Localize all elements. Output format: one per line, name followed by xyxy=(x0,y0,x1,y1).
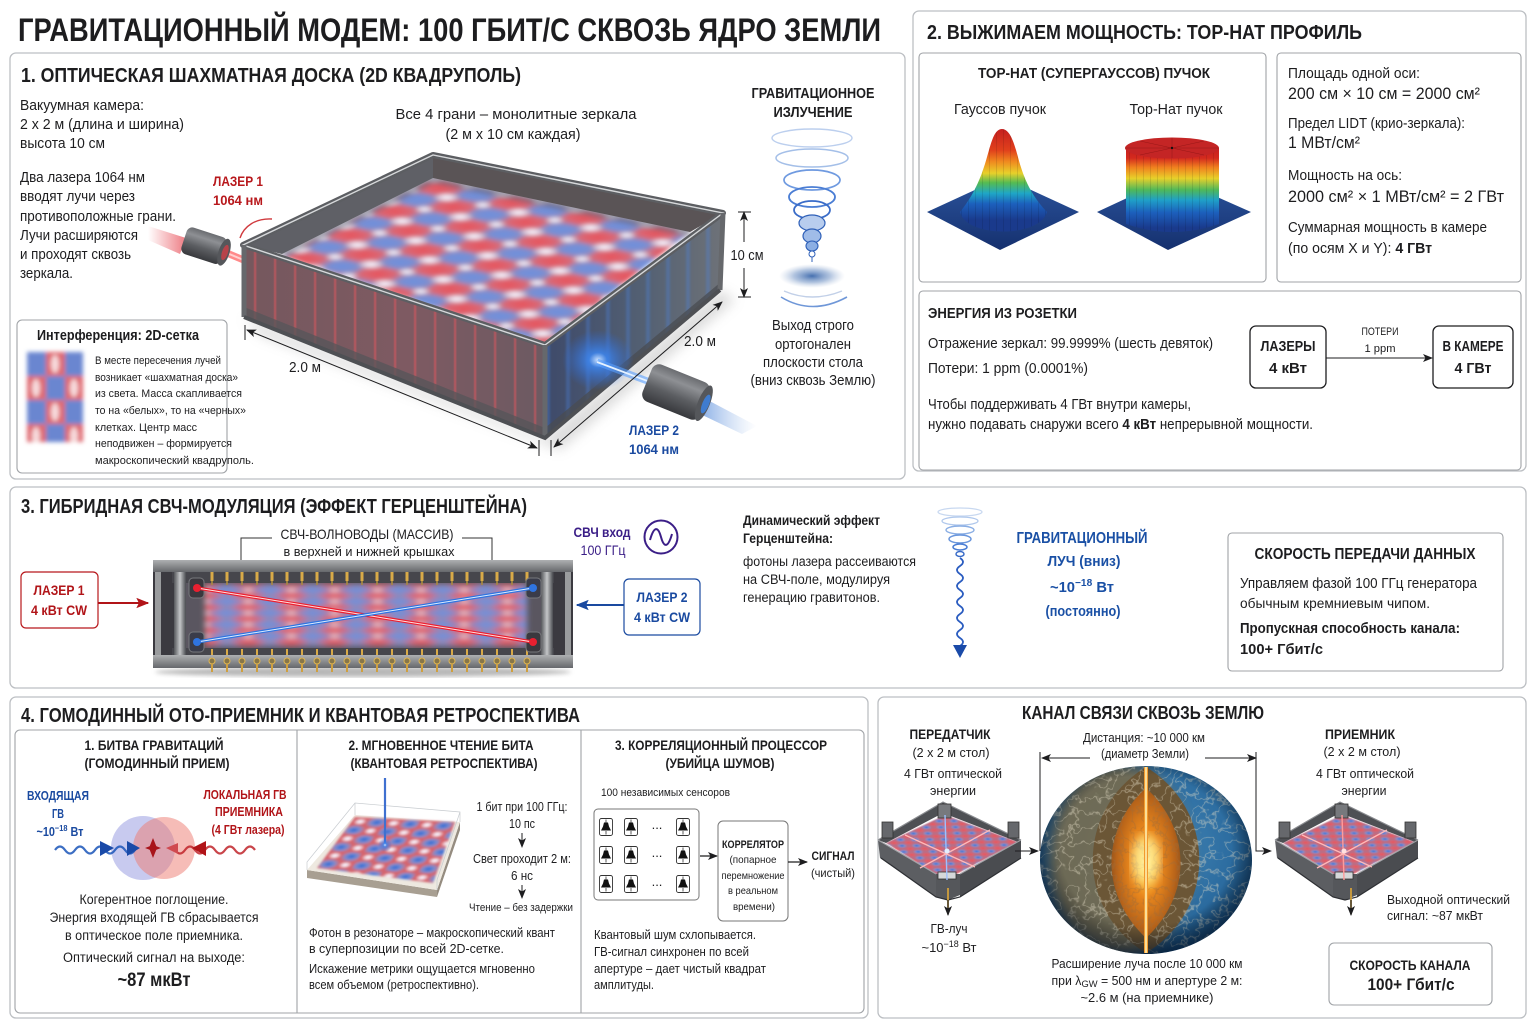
text block: interference description: из света. Масса скапливается xyxy=(95,388,242,400)
text block: dynamic Gertsenshtein effect: Динамический эффект xyxy=(743,513,880,528)
label: gravity beam: ~10 xyxy=(1050,580,1075,596)
arrow: losses: 1 ppm xyxy=(1364,343,1396,355)
text block: lasers: вводят лучи через xyxy=(20,189,135,205)
icon: microwave generator xyxy=(644,520,678,554)
panel 5: channel through the Earth xyxy=(878,697,1526,1018)
label: gravity beam: Вт xyxy=(1092,580,1114,596)
text block: coherent absorption: ~87 мкВт xyxy=(118,970,190,991)
sub-panel 3: correlation processor xyxy=(594,736,855,992)
text block: lasers: противоположные грани. xyxy=(20,209,176,225)
diagram: sensor array: ... xyxy=(652,817,662,832)
text block: interference description xyxy=(95,355,254,467)
label: optical output xyxy=(1387,893,1510,923)
panel: power calculation: 2000 см² × 1 МВт/см² = 2 ГВт xyxy=(1288,188,1504,206)
heading 3: 3. ГИБРИДНАЯ СВЧ-МОДУЛЯЦИЯ (ЭФФЕКТ ГЕРЦЕНШТЕЙНА) xyxy=(21,494,527,518)
label: gravity beam xyxy=(1016,528,1148,620)
label: GW beam: Вт xyxy=(959,940,977,955)
panel: power calculation: 1 МВт/см² xyxy=(1288,134,1360,152)
label: incoming GW: −18 xyxy=(55,823,68,833)
text block: lasers: зеркала. xyxy=(20,266,73,282)
panel: energy from the socket: ЭНЕРГИЯ ИЗ РОЗЕТКИ xyxy=(928,306,1077,322)
sub-panel 3: correlation processor: 3. КОРРЕЛЯЦИОННЫЙ ПРОЦЕССОР xyxy=(615,736,827,753)
arrow: losses: ПОТЕРИ xyxy=(1362,326,1398,338)
label: gravity beam: (постоянно) xyxy=(1046,604,1121,620)
box: correlator xyxy=(718,821,788,921)
text block: coherent absorption: в оптическое поле приемника. xyxy=(65,928,243,943)
box: in chamber 4 GW: В КАМЕРЕ xyxy=(1442,339,1504,355)
panel: energy from the socket xyxy=(919,291,1521,470)
dividers xyxy=(297,730,581,1013)
label: receiver: (2 x 2 м стол) xyxy=(1324,744,1400,759)
arrow: laser 2 in xyxy=(577,604,624,606)
label: receiver xyxy=(1316,726,1414,798)
label: gravity beam: ЛУЧ (вниз) xyxy=(1048,554,1121,570)
label: microwave input 100 GHz: 100 ГГц xyxy=(580,542,626,558)
text block: beam spread: при λ xyxy=(1052,974,1082,988)
box: data rate: СКОРОСТЬ ПЕРЕДАЧИ ДАННЫХ xyxy=(1254,546,1476,563)
chart: gaussian beam xyxy=(927,102,1079,250)
label: optical output: сигнал: ~87 мкВт xyxy=(1387,909,1483,923)
label: microwave input 100 GHz: СВЧ вход xyxy=(574,524,631,540)
box: data rate: Управляем фазой 100 ГГц генератора xyxy=(1240,576,1478,592)
label: distance xyxy=(1040,731,1271,851)
heading 4: 4. ГОМОДИННЫЙ ОТО-ПРИЕМНИК И КВАНТОВАЯ РЕТРОСПЕКТИВА xyxy=(21,703,580,727)
label: optical output: Выходной оптический xyxy=(1387,893,1510,907)
label: clean signal: (чистый) xyxy=(811,866,855,880)
label: receiver: ПРИЕМНИК xyxy=(1325,726,1395,742)
box: channel speed: СКОРОСТЬ КАНАЛА xyxy=(1350,957,1470,973)
text block: beam spread: GW xyxy=(1081,979,1098,990)
text block: lasers: Два лазера 1064 нм xyxy=(20,170,145,186)
box: lasers 4 kW: ЛАЗЕРЫ xyxy=(1260,339,1316,355)
label: microwave waveguides xyxy=(241,526,492,560)
sub-panel 1: battle of gravities: 1. БИТВА ГРАВИТАЦИЙ xyxy=(84,736,224,753)
label: local GW: ЛОКАЛЬНАЯ ГВ xyxy=(204,788,286,802)
text block: interference description: макроскопический квадруполь. xyxy=(95,455,254,467)
label: microwave waveguides: СВЧ-ВОЛНОВОДЫ (МАССИВ) xyxy=(280,526,454,542)
label: distance: Дистанция: ~10 000 км xyxy=(1083,731,1205,745)
dimension: front left 2.0 m: 2.0 м xyxy=(289,360,321,376)
label: incoming GW xyxy=(27,789,89,839)
panel: energy from the socket: Потери: 1 ppm (0.0001%) xyxy=(928,361,1088,377)
label: sensors: 100 независимых сенсоров xyxy=(601,787,730,799)
dimension: height 10 cm xyxy=(730,212,764,297)
box: laser 2 4 kW CW: 4 кВт CW xyxy=(634,609,691,625)
text block: interference description: неподвижен – формируется xyxy=(95,438,232,450)
inner frame xyxy=(15,730,864,1013)
text block: photon in resonator: Фотон в резонаторе – макроскопический квант xyxy=(309,926,555,940)
text block: lasers: и проходят сквозь xyxy=(20,247,131,263)
box: laser 1 4 kW CW: ЛАЗЕР 1 xyxy=(34,582,85,598)
text block: dynamic Gertsenshtein effect: на СВЧ-поле, модулируя xyxy=(743,572,890,587)
label: transmitter: ПЕРЕДАТЧИК xyxy=(910,726,991,742)
sub-panel 2: instant bit reading xyxy=(307,737,573,992)
box: in chamber 4 GW xyxy=(1433,326,1513,388)
label: incoming GW: Вт xyxy=(67,825,84,839)
panel 4: homodyne receiver xyxy=(10,697,868,1018)
text block: coherent absorption: Энергия входящей ГВ сбрасывается xyxy=(50,910,258,925)
sub-panel 2: instant bit reading: (КВАНТОВАЯ РЕТРОСПЕКТИВА) xyxy=(350,755,538,771)
icon: gravity wave cone xyxy=(772,129,852,306)
box: data rate: обычным кремниевым чипом. xyxy=(1240,595,1430,611)
dimension: front right 2.0 m: 2.0 м xyxy=(684,334,716,350)
label: GW beam: −18 xyxy=(944,939,959,949)
label: laser 1 xyxy=(213,173,263,208)
text block: orthogonal output: (вниз сквозь Землю) xyxy=(750,373,876,389)
text block: quantum noise: ГВ-сигнал синхронен по всей xyxy=(594,945,749,959)
label: transmitter: (2 x 2 м стол) xyxy=(912,745,990,760)
panel: power calculation: Мощность на ось: xyxy=(1288,168,1402,184)
text block: dynamic Gertsenshtein effect: фотоны лазера рассеиваются xyxy=(743,554,916,569)
text block: orthogonal output: ортогонален xyxy=(775,337,851,353)
heading 5: КАНАЛ СВЯЗИ СКВОЗЬ ЗЕМЛЮ xyxy=(1022,703,1264,723)
label: distance: (диаметр Земли) xyxy=(1101,747,1189,761)
text block: timing ladder xyxy=(469,800,573,914)
label: incoming GW: ~10 xyxy=(36,825,58,839)
label: transmitter: 4 ГВт оптической xyxy=(904,766,1002,781)
dimension: front right 2.0 m xyxy=(551,302,722,456)
icon: gravity beam down xyxy=(938,508,982,658)
box: laser 2 4 kW CW: ЛАЗЕР 2 xyxy=(636,589,688,605)
panel: power calculation: 200 см × 10 см = 2000 см² xyxy=(1288,85,1480,103)
text block: vacuum chamber xyxy=(20,98,184,152)
heading: gravity radiation: ГРАВИТАЦИОННОЕ xyxy=(752,86,875,102)
arrow: laser 1 in xyxy=(98,602,148,604)
label: gravity beam: −18 xyxy=(1075,578,1093,589)
arrow: correlator to signal xyxy=(788,861,807,863)
box: laser 1 4 kW CW: 4 кВт CW xyxy=(31,602,88,618)
arrow: array to correlator xyxy=(700,855,717,857)
box: correlator: в реальном xyxy=(728,885,778,897)
sub-panel 1: battle of gravities: (ГОМОДИННЫЙ ПРИЕМ) xyxy=(84,754,230,771)
illustration: transmitter table xyxy=(878,802,1038,915)
box: channel speed: 100+ Гбит/с xyxy=(1368,976,1454,994)
icon: laser 1 emitter xyxy=(148,219,272,267)
label: local GW: ПРИЕМНИКА xyxy=(215,805,283,819)
label: local GW: (4 ГВт лазера) xyxy=(212,823,284,837)
heading: gravity radiation xyxy=(752,86,875,121)
illustration: Earth cross-section xyxy=(1040,764,1252,956)
panel: top-hat beam: ТОР-НАТ (СУПЕРГАУССОВ) ПУЧОК xyxy=(978,66,1210,82)
text block: vacuum chamber: 2 x 2 м (длина и ширина) xyxy=(20,117,184,133)
text block: orthogonal output: плоскости стола xyxy=(763,355,864,371)
heading 1: 1. ОПТИЧЕСКАЯ ШАХМАТНАЯ ДОСКА (2D КВАДРУПОЛЬ) xyxy=(21,65,521,87)
chart: top-hat beam: Тор-Нат пучок xyxy=(1130,102,1223,118)
label: GW beam: ~10 xyxy=(922,940,944,955)
label: incoming GW: ГВ xyxy=(52,807,64,821)
text block: vacuum chamber: высота 10 см xyxy=(20,136,105,152)
text block: quantum noise: Квантовый шум схлопывается. xyxy=(594,928,756,942)
text block: interference description: В месте пересечения лучей xyxy=(95,355,221,367)
swatch: interference pattern xyxy=(27,352,83,442)
text block: quantum noise: амплитуды. xyxy=(594,978,654,992)
text block: beam spread: Расширение луча после 10 000 км xyxy=(1052,957,1242,971)
box: channel speed xyxy=(1329,943,1492,1005)
label: mirrors xyxy=(396,107,637,143)
panel 3: hybrid microwave modulation xyxy=(10,487,1526,688)
illustration: chamber box xyxy=(243,155,735,450)
label: gravity beam: ГРАВИТАЦИОННЫЙ xyxy=(1016,528,1148,547)
panel: power calculation: Предел LIDT (крио-зеркала): xyxy=(1288,116,1465,132)
illustration: resonator with waveguides xyxy=(153,560,573,677)
sub-panel 1: battle of gravities xyxy=(27,736,286,991)
panel: power calculation: Площадь одной оси: xyxy=(1288,66,1420,82)
dimension: height 10 cm: 10 см xyxy=(730,248,764,264)
text block: coherent absorption: Оптический сигнал на выходе: xyxy=(63,950,245,965)
label: clean signal: СИГНАЛ xyxy=(812,849,854,863)
box: correlator: КОРРЕЛЯТОР xyxy=(722,839,784,851)
diagram: interfering waves xyxy=(55,816,255,880)
label: receiver: энергии xyxy=(1342,783,1386,798)
label: mirrors: Все 4 грани – монолитные зеркала xyxy=(396,107,637,123)
label: transmitter xyxy=(904,726,1002,798)
text block: dynamic Gertsenshtein effect xyxy=(743,513,916,605)
box: data rate: Пропускная способность канала: xyxy=(1240,621,1460,637)
callout: interference 2D grid: Интерференция: 2D-сетка xyxy=(37,328,200,344)
label: laser 1: ЛАЗЕР 1 xyxy=(213,173,263,189)
panel: power calculation: (по осям X и Y): 4 ГВт xyxy=(1288,241,1432,257)
text block: timing ladder: 6 нс xyxy=(511,868,533,883)
panel 1: optical checkerboard xyxy=(10,53,905,479)
diagram: sensor array: ... xyxy=(652,874,662,889)
title: ГРАВИТАЦИОННЫЙ МОДЕМ: 100 ГБИТ/С СКВОЗЬ ЯДРО ЗЕМЛИ xyxy=(18,12,881,48)
chart: gaussian beam: Гауссов пучок xyxy=(954,102,1047,118)
panel: power calculation xyxy=(1277,53,1521,282)
text block: timing ladder: 10 пс xyxy=(509,816,535,831)
text block: lasers: Лучи расширяются xyxy=(20,228,138,244)
panel: energy from the socket: нужно подавать снаружи всего 4 кВт непрерывной мощности. xyxy=(928,417,1313,433)
box: correlator: времени) xyxy=(733,901,775,913)
illustration: resonator plate xyxy=(307,778,460,897)
text block: beam spread xyxy=(1052,957,1242,1005)
text block: timing ladder: Чтение – без задержки xyxy=(469,902,573,914)
text block: coherent absorption xyxy=(50,892,258,991)
chart: top-hat beam xyxy=(1097,102,1251,250)
arrow: losses xyxy=(1326,326,1432,358)
box: correlator: (попарное xyxy=(730,854,777,866)
text block: lasers xyxy=(20,170,176,282)
box: in chamber 4 GW: 4 ГВт xyxy=(1454,361,1492,377)
label: transmitter: энергии xyxy=(930,783,976,798)
text block: orthogonal output xyxy=(750,318,876,389)
text block: beam spread: = 500 нм и апертуре 2 м: xyxy=(1098,974,1242,988)
label: GW beam: ГВ-луч xyxy=(930,921,968,936)
illustration: receiver table xyxy=(1275,802,1418,915)
label: laser 2 xyxy=(629,422,679,457)
text block: quantum noise: апертуре – дает чистый квадрат xyxy=(594,962,766,976)
heading: gravity radiation: ИЗЛУЧЕНИЕ xyxy=(774,105,853,121)
sub-panel 2: instant bit reading: 2. МГНОВЕННОЕ ЧТЕНИЕ БИТА xyxy=(348,737,534,753)
label: microwave waveguides: в верхней и нижней крышках xyxy=(284,544,455,559)
label: incoming GW: ВХОДЯЩАЯ xyxy=(27,789,89,803)
box: data rate: 100+ Гбит/с xyxy=(1240,642,1323,658)
text block: timing ladder: Свет проходит 2 м: xyxy=(473,852,571,866)
box: laser 2 4 kW CW xyxy=(624,579,700,635)
diagram: sensor array: ... xyxy=(652,845,662,860)
text block: interference description: то на «белых», то на «черных» xyxy=(95,405,246,417)
box: laser 1 4 kW CW xyxy=(21,572,98,628)
text block: quantum noise xyxy=(594,928,766,992)
box: correlator: перемножение xyxy=(722,870,785,882)
text block: beam spread: ~2.6 м (на приемнике) xyxy=(1080,991,1214,1005)
label: local GW xyxy=(204,788,286,837)
label: laser 2: ЛАЗЕР 2 xyxy=(629,422,679,438)
box: lasers 4 kW: 4 кВт xyxy=(1269,361,1307,377)
label: mirrors: (2 м x 10 см каждая) xyxy=(446,127,580,143)
label: laser 2: 1064 нм xyxy=(629,441,679,457)
text block: photon in resonator: Искажение метрики ощущается мгновенно xyxy=(309,962,535,976)
text block: interference description: возникает «шахматная доска» xyxy=(95,372,238,384)
text block: interference description: клетках. Центр масс xyxy=(95,422,197,434)
text block: photon in resonator: в суперпозиции по всей 2D-сетке. xyxy=(309,942,504,956)
label: microwave input 100 GHz xyxy=(574,524,631,558)
text block: photon in resonator: всем объемом (ретроспективно). xyxy=(309,978,479,992)
text block: vacuum chamber: Вакуумная камера: xyxy=(20,98,144,114)
text block: photon in resonator xyxy=(309,926,555,992)
panel: power calculation: Суммарная мощность в камере xyxy=(1288,220,1487,236)
panel: energy from the socket: Отражение зеркал: 99.9999% (шесть девяток) xyxy=(928,336,1213,352)
diagram: sensor array xyxy=(594,809,699,900)
label: laser 1: 1064 нм xyxy=(213,192,263,208)
panel: energy from the socket: Чтобы поддерживать 4 ГВт внутри камеры, xyxy=(928,397,1191,413)
text block: timing ladder: 1 бит при 100 ГГц: xyxy=(476,800,568,814)
text block: dynamic Gertsenshtein effect: генерацию гравитонов. xyxy=(743,590,880,605)
box: lasers 4 kW xyxy=(1250,326,1326,388)
box: data rate xyxy=(1228,533,1503,671)
panel 2: squeezing power xyxy=(913,11,1526,471)
text block: dynamic Gertsenshtein effect: Герценштейна: xyxy=(743,531,833,546)
label: clean signal xyxy=(811,849,855,880)
label: GW beam xyxy=(922,921,977,955)
label: receiver: 4 ГВт оптической xyxy=(1316,766,1414,781)
dimension: front left 2.0 m xyxy=(245,325,539,456)
callout: interference 2D grid xyxy=(17,320,254,473)
panel: top-hat beam xyxy=(919,53,1266,282)
heading 2: 2. ВЫЖИМАЕМ МОЩНОСТЬ: ТОР-НАТ ПРОФИЛЬ xyxy=(927,22,1362,44)
icon: laser 2 emitter xyxy=(640,362,757,434)
sub-panel 3: correlation processor: (УБИЙЦА ШУМОВ) xyxy=(666,754,774,771)
text block: coherent absorption: Когерентное поглощение. xyxy=(80,892,228,907)
text block: orthogonal output: Выход строго xyxy=(772,318,854,334)
